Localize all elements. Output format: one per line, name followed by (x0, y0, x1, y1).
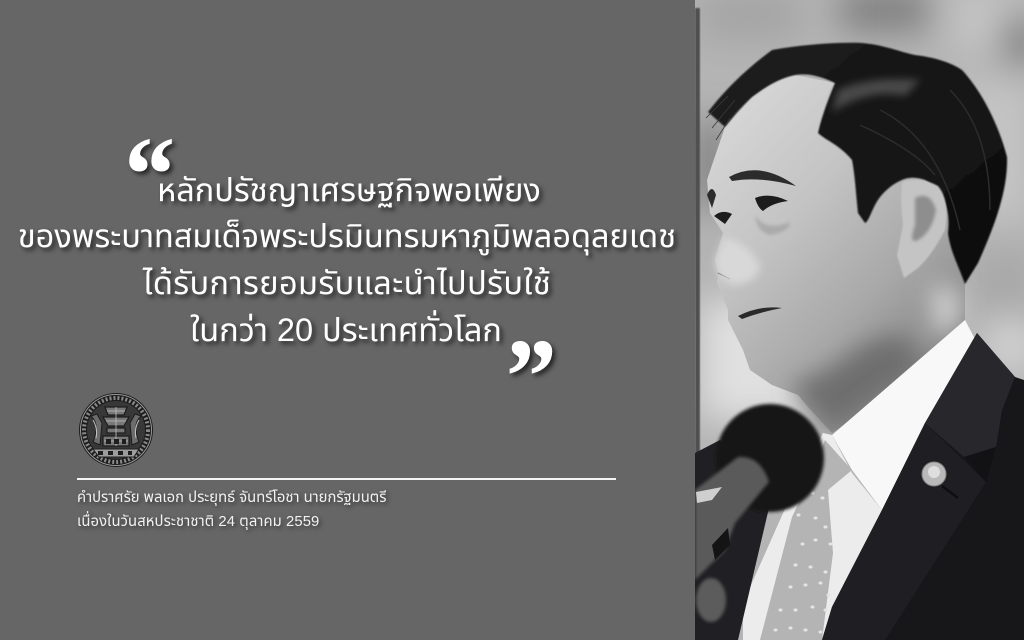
suit jacket (822, 333, 1024, 640)
quote line 1: หลักปรัชญาเศรษฐกิจพอเพียง (157, 172, 541, 208)
shirt collar (832, 320, 977, 510)
quote line 2: ของพระบาทสมเด็จพระปรมินทรมหาภูมิพลอดุลยเดช (18, 218, 676, 254)
portrait photo (695, 0, 1024, 640)
attribution line 2: เนื่องในวันสหประชาชาติ 24 ตุลาคม 2559 (77, 514, 319, 530)
lapel pin (922, 462, 958, 498)
hair (706, 43, 1007, 284)
microphone (695, 404, 824, 640)
closing quotation mark: ” (500, 318, 554, 437)
shirt front (743, 433, 882, 640)
divider rule (77, 478, 616, 480)
opening quotation mark: “ (119, 116, 173, 235)
face and neck (707, 75, 965, 433)
icon: government seal (79, 393, 153, 467)
eyes, brows, nose and mouth (707, 170, 796, 319)
ear (897, 180, 946, 278)
quote line 3: ได้รับการยอมรับและนำไปปรับใช้ (143, 265, 551, 301)
necktie (760, 440, 852, 640)
blurred background (695, 0, 1024, 640)
neck shadow (790, 285, 960, 433)
attribution line 1: คำปราศรัย พลเอก ประยุทธ์ จันทร์โอชา นายกรัฐมนตรี (77, 490, 386, 506)
quote line 4: ในกว่า 20 ประเทศทั่วโลก (190, 312, 502, 348)
panel: grey quote background (0, 0, 695, 640)
